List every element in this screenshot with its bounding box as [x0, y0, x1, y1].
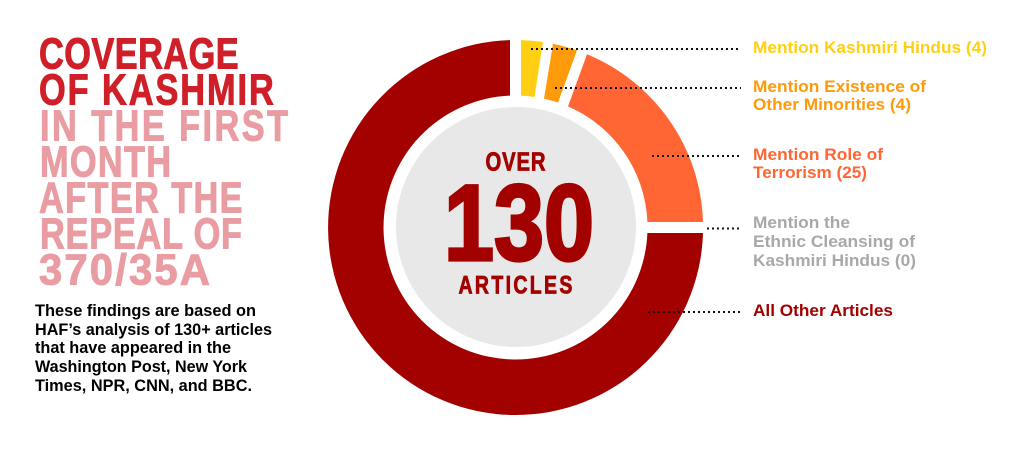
description text: that have appeared in the	[35, 339, 231, 357]
segment: terrorism	[568, 54, 703, 222]
description text: HAF’s analysis of 130+ articles	[35, 321, 272, 339]
legend labels	[753, 38, 987, 320]
leader lines	[531, 49, 741, 312]
title line: subdued	[39, 101, 288, 295]
segment: other minorities	[544, 44, 577, 102]
title line: subdued: 370/35A	[39, 246, 210, 295]
center label: OVER	[486, 147, 546, 176]
label: ethnic cleansing: Ethnic Cleansing of	[753, 232, 915, 251]
description text	[35, 302, 272, 395]
label: other minorities: Mention Existence of	[753, 77, 926, 96]
center label: 130	[444, 162, 594, 283]
title	[39, 29, 288, 295]
label: terrorism: Terrorism (25)	[753, 163, 867, 182]
description text: Times, NPR, CNN, and BBC.	[35, 377, 252, 395]
label: ethnic cleansing	[753, 213, 916, 270]
title line: subdued: IN THE FIRST	[40, 101, 288, 151]
title line: subdued: AFTER THE	[39, 173, 243, 223]
label: ethnic cleansing: Kashmiri Hindus (0)	[753, 251, 916, 270]
title line: subdued: REPEAL OF	[40, 209, 242, 259]
description text: These findings are based on	[35, 302, 256, 320]
label: ethnic cleansing: Mention the	[753, 213, 850, 232]
segment: Kashmiri Hindus	[521, 40, 543, 97]
title line: highlighted	[39, 29, 274, 115]
label: Kashmiri Hindus: Mention Kashmiri Hindus (4)	[753, 38, 987, 57]
center label	[444, 147, 594, 299]
label: other minorities	[753, 77, 926, 114]
label: terrorism: Mention Role of	[753, 145, 883, 164]
center label: ARTICLES	[458, 271, 572, 299]
center circle	[396, 107, 636, 347]
title line: highlighted: COVERAGE	[39, 29, 239, 79]
description text: Washington Post, New York	[35, 358, 248, 376]
segment: all other articles	[328, 40, 703, 415]
title line: highlighted: OF KASHMIR	[39, 65, 274, 115]
label: other minorities: Other Minorities (4)	[753, 95, 911, 114]
label: terrorism	[753, 145, 883, 182]
label: all other articles: All Other Articles	[753, 301, 893, 320]
donut chart	[328, 40, 703, 415]
title line: subdued: MONTH	[40, 137, 171, 187]
